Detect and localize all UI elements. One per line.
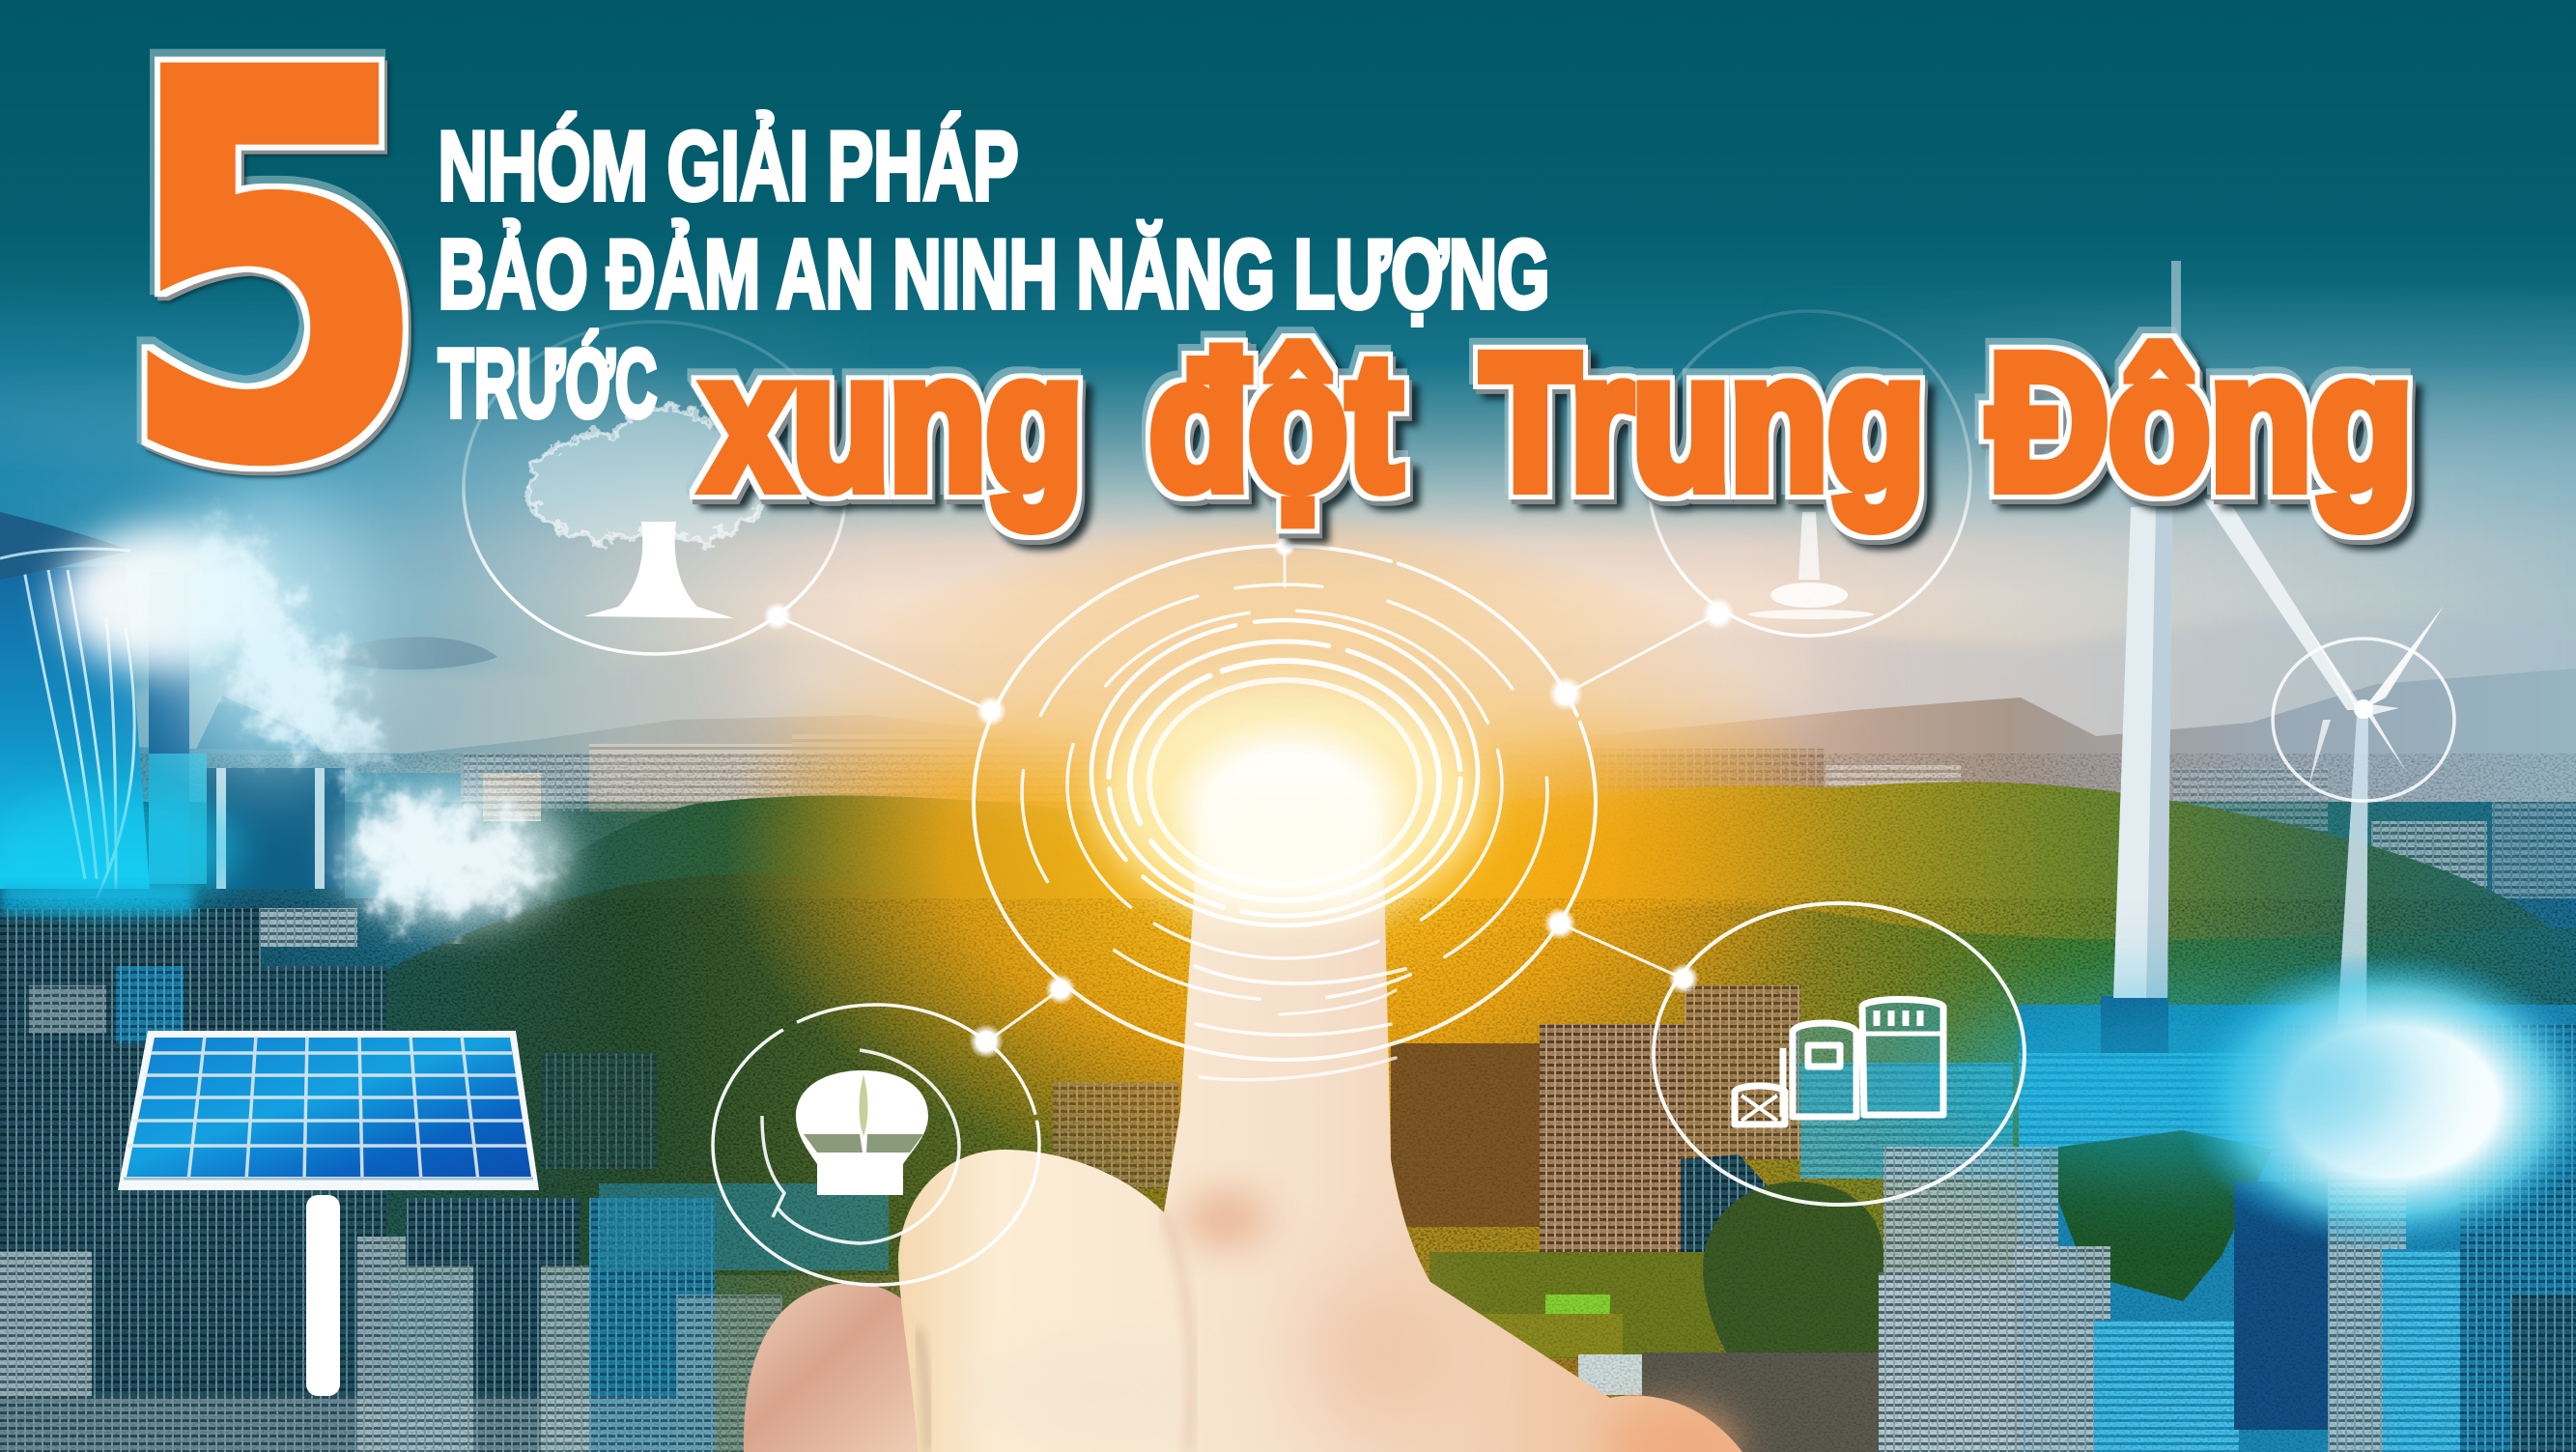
city: centre-right buildings xyxy=(1391,985,2013,1452)
hand and pointing finger xyxy=(744,744,1742,1452)
background: lower landscape base xyxy=(0,802,2576,1452)
icon: large wind turbine xyxy=(2113,261,2362,998)
icon: small wind turbine in a circle xyxy=(2273,606,2454,1024)
heading: orange bevelled title: Đông xyxy=(1989,315,2413,528)
icon: wind turbine in a circle, top right xyxy=(1648,311,1970,636)
glows: blue and white light on the city xyxy=(0,483,2576,1251)
icon: light bulb in a circle xyxy=(713,1005,1039,1285)
icon: tree in a faded circle xyxy=(464,322,846,654)
heading: white three-line title: BẢO ĐẢM AN NINH NĂNG LƯỢNG xyxy=(439,220,1549,328)
heading: white three-line title: NHÓM GIẢI PHÁP xyxy=(439,112,1018,220)
network: connector lines xyxy=(778,613,1717,1041)
background: central amber glow xyxy=(724,512,1845,1188)
heading: orange bevelled title: đột xyxy=(1149,315,1401,528)
heading: orange bevelled title: xung xyxy=(704,315,1083,528)
icon: solar panel xyxy=(118,1031,539,1396)
background: green hills xyxy=(319,782,2576,1275)
heading: orange bevelled title: Trung xyxy=(1482,315,1925,528)
heading: white three-line title: TRƯỚC xyxy=(439,330,657,439)
city: grain on buildings xyxy=(0,898,2576,1452)
network: concentric energy rings xyxy=(974,546,1596,1080)
heading: white three-line title xyxy=(439,112,1549,439)
central glow on the fingertip xyxy=(1096,686,1483,918)
icon: battery and fuel tanks in a circle xyxy=(1654,903,2024,1205)
background: sky gradient xyxy=(0,186,2576,754)
background: skyline along the horizon xyxy=(464,734,2576,918)
background: grain texture xyxy=(0,754,2576,1452)
heading: orange bevelled title xyxy=(704,315,2413,528)
city: left skyline and glass tower xyxy=(0,512,1178,1452)
network: nodes xyxy=(763,536,1735,1059)
city: right skyline xyxy=(1879,996,2576,1452)
background: distant mountains xyxy=(0,618,2576,927)
